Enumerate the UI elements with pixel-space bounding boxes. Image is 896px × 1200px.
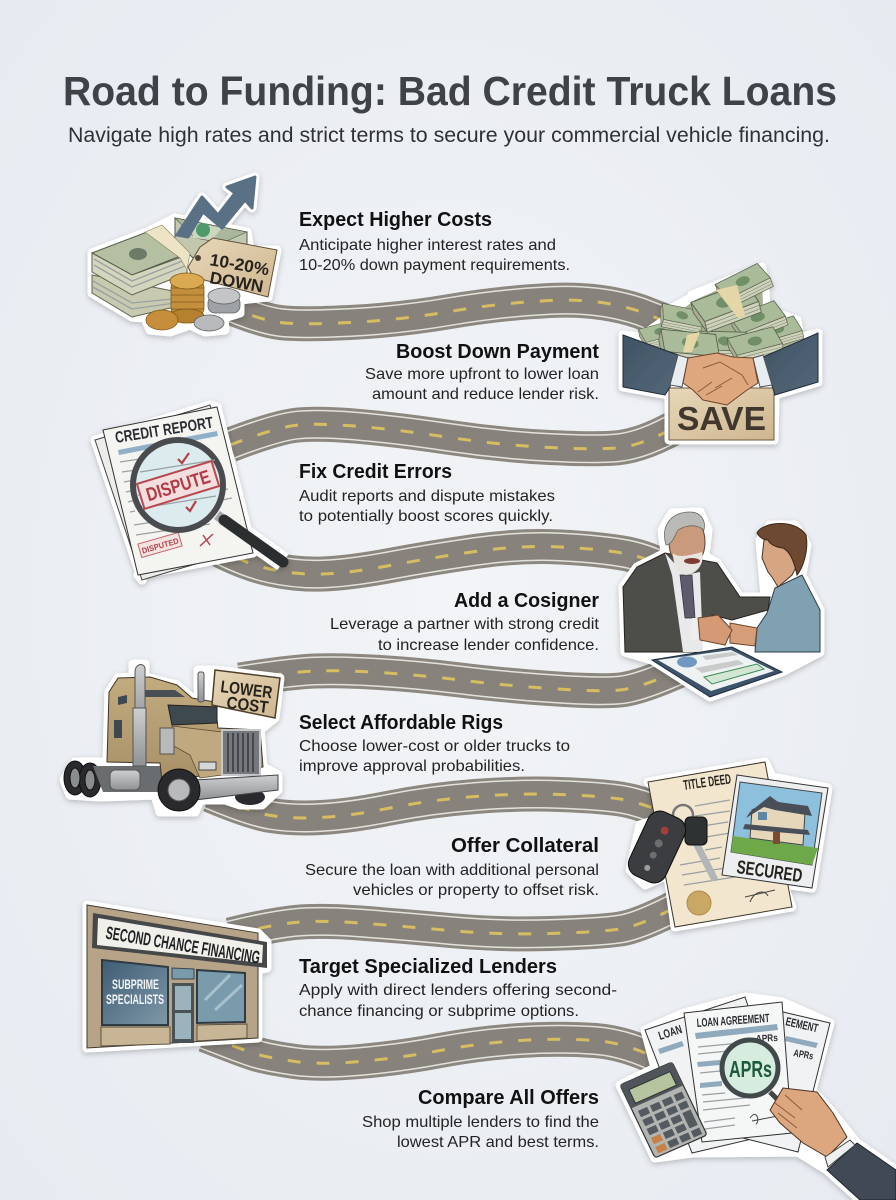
house photo xyxy=(722,775,828,888)
door xyxy=(172,968,194,1043)
text block: Boost Down Payment: Save more upfront to lower loan xyxy=(365,366,599,383)
text block: Compare All Offers: Shop multiple lenders to find the xyxy=(362,1114,599,1131)
calculator xyxy=(620,1062,707,1158)
text block: Boost Down Payment xyxy=(365,341,599,403)
hand and sleeve xyxy=(770,1088,896,1200)
APRs magnifier xyxy=(722,1040,782,1104)
title: Road to Funding: Bad Credit Truck Loans xyxy=(63,68,837,114)
back right sheet: APRs xyxy=(792,1048,814,1062)
left window xyxy=(102,960,168,1025)
front loan agreement: APRs xyxy=(756,1033,778,1045)
icon: older man and young cosigner shaking hands xyxy=(623,512,820,697)
text block: Select Affordable Rigs: Select Affordable Rigs xyxy=(299,712,503,734)
text block: Offer Collateral: Offer Collateral xyxy=(451,835,599,857)
exhaust stacks xyxy=(133,665,204,766)
text block: Compare All Offers: lowest APR and best terms. xyxy=(397,1134,599,1151)
text block: Target Specialized Lenders: Apply with direct lenders offering second- xyxy=(299,982,617,999)
left window: SPECIALISTS xyxy=(106,991,164,1007)
text block: Add a Cosigner: to increase lender confidence. xyxy=(378,637,599,654)
text block: Target Specialized Lenders: chance financing or subprime options. xyxy=(299,1003,579,1020)
price tag: 10-20% xyxy=(208,250,271,279)
house photo: SECURED xyxy=(735,857,804,887)
text block: Add a Cosigner: Leverage a partner with strong credit xyxy=(330,616,600,633)
text block: Fix Credit Errors: Fix Credit Errors xyxy=(299,461,452,483)
icon: loan offers, calculator, hand with APR magnifier xyxy=(620,997,896,1200)
winding road xyxy=(205,300,690,1065)
SAVE sign: SAVE xyxy=(677,400,766,437)
text block: Boost Down Payment: Boost Down Payment xyxy=(396,341,599,363)
text block: Add a Cosigner xyxy=(330,590,600,654)
icon: credit report under magnifier xyxy=(95,405,283,580)
text block: Offer Collateral xyxy=(305,835,599,899)
icon: cash, coins, rising arrow and 10-20% down tag xyxy=(92,177,277,332)
text block: Add a Cosigner: Add a Cosigner xyxy=(454,590,599,612)
text block: Offer Collateral: vehicles or property to offset risk. xyxy=(353,882,599,899)
price tag xyxy=(188,238,277,297)
grille xyxy=(222,730,260,775)
text block: Fix Credit Errors: Audit reports and dispute mistakes xyxy=(299,488,555,505)
sign board xyxy=(92,913,267,968)
text block: Fix Credit Errors: to potentially boost scores quickly. xyxy=(299,508,553,525)
subtitle: Navigate high rates and strict terms to secure your commercial vehicle financing. xyxy=(68,123,830,147)
text block: Select Affordable Rigs: improve approval probabilities. xyxy=(299,758,525,775)
text block: Compare All Offers xyxy=(362,1087,599,1151)
deed paper: TITLE DEED xyxy=(682,770,732,793)
rear wheels xyxy=(64,761,101,797)
lower cost sign xyxy=(212,670,280,718)
loan document xyxy=(652,647,782,697)
text block: Expect Higher Costs: Anticipate higher interest rates and xyxy=(299,237,556,254)
back left sheet xyxy=(645,997,790,1153)
back left sheet: LOAN xyxy=(657,1022,684,1043)
icon: second chance financing storefront xyxy=(87,905,267,1048)
magnifier with dispute stamp: DISPUTE xyxy=(144,467,213,506)
text block: Select Affordable Rigs: Choose lower-cost or older trucks to xyxy=(299,738,570,755)
icon: save money handshake xyxy=(623,261,818,440)
SAVE sign xyxy=(669,388,774,440)
text block: Target Specialized Lenders: Target Specialized Lenders xyxy=(299,956,557,978)
young man xyxy=(730,523,820,652)
icon: title deed, keys and secured house photo xyxy=(624,762,828,927)
older man xyxy=(623,512,770,652)
icon: tan semi truck with lower cost sign xyxy=(64,664,280,812)
text block: Expect Higher Costs xyxy=(299,209,570,274)
deed paper xyxy=(648,762,792,927)
text block: Compare All Offers: Compare All Offers xyxy=(418,1087,599,1109)
lower cost sign: LOWER xyxy=(220,677,273,702)
front loan agreement xyxy=(684,1002,792,1142)
icon: credit report under magnifier: CREDIT REPORT xyxy=(114,415,215,447)
back right sheet xyxy=(743,1012,830,1152)
small disputed stamp: DISPUTED xyxy=(141,536,180,556)
text block: Fix Credit Errors xyxy=(299,461,555,525)
car keys xyxy=(624,805,715,887)
price tag: DOWN xyxy=(208,268,265,296)
lower cost sign: COST xyxy=(226,693,270,717)
text block: Select Affordable Rigs xyxy=(299,712,570,775)
APRs magnifier: APRs xyxy=(729,1056,772,1082)
sign board: SECOND CHANCE FINANCING xyxy=(104,923,262,968)
front loan agreement: LOAN AGREEMENT xyxy=(696,1011,770,1030)
text block: Target Specialized Lenders xyxy=(299,956,617,1020)
text block: Boost Down Payment: amount and reduce lender risk. xyxy=(372,386,599,403)
text block: Offer Collateral: Secure the loan with additional personal xyxy=(305,862,599,879)
back right sheet: EEMENT xyxy=(784,1014,820,1035)
text block: Expect Higher Costs: 10-20% down payment requirements. xyxy=(299,257,570,274)
magnifier with dispute stamp xyxy=(133,440,283,562)
front wheel xyxy=(158,769,200,811)
left window: SUBPRIME xyxy=(112,976,159,992)
text block: Expect Higher Costs: Expect Higher Costs xyxy=(299,209,492,231)
